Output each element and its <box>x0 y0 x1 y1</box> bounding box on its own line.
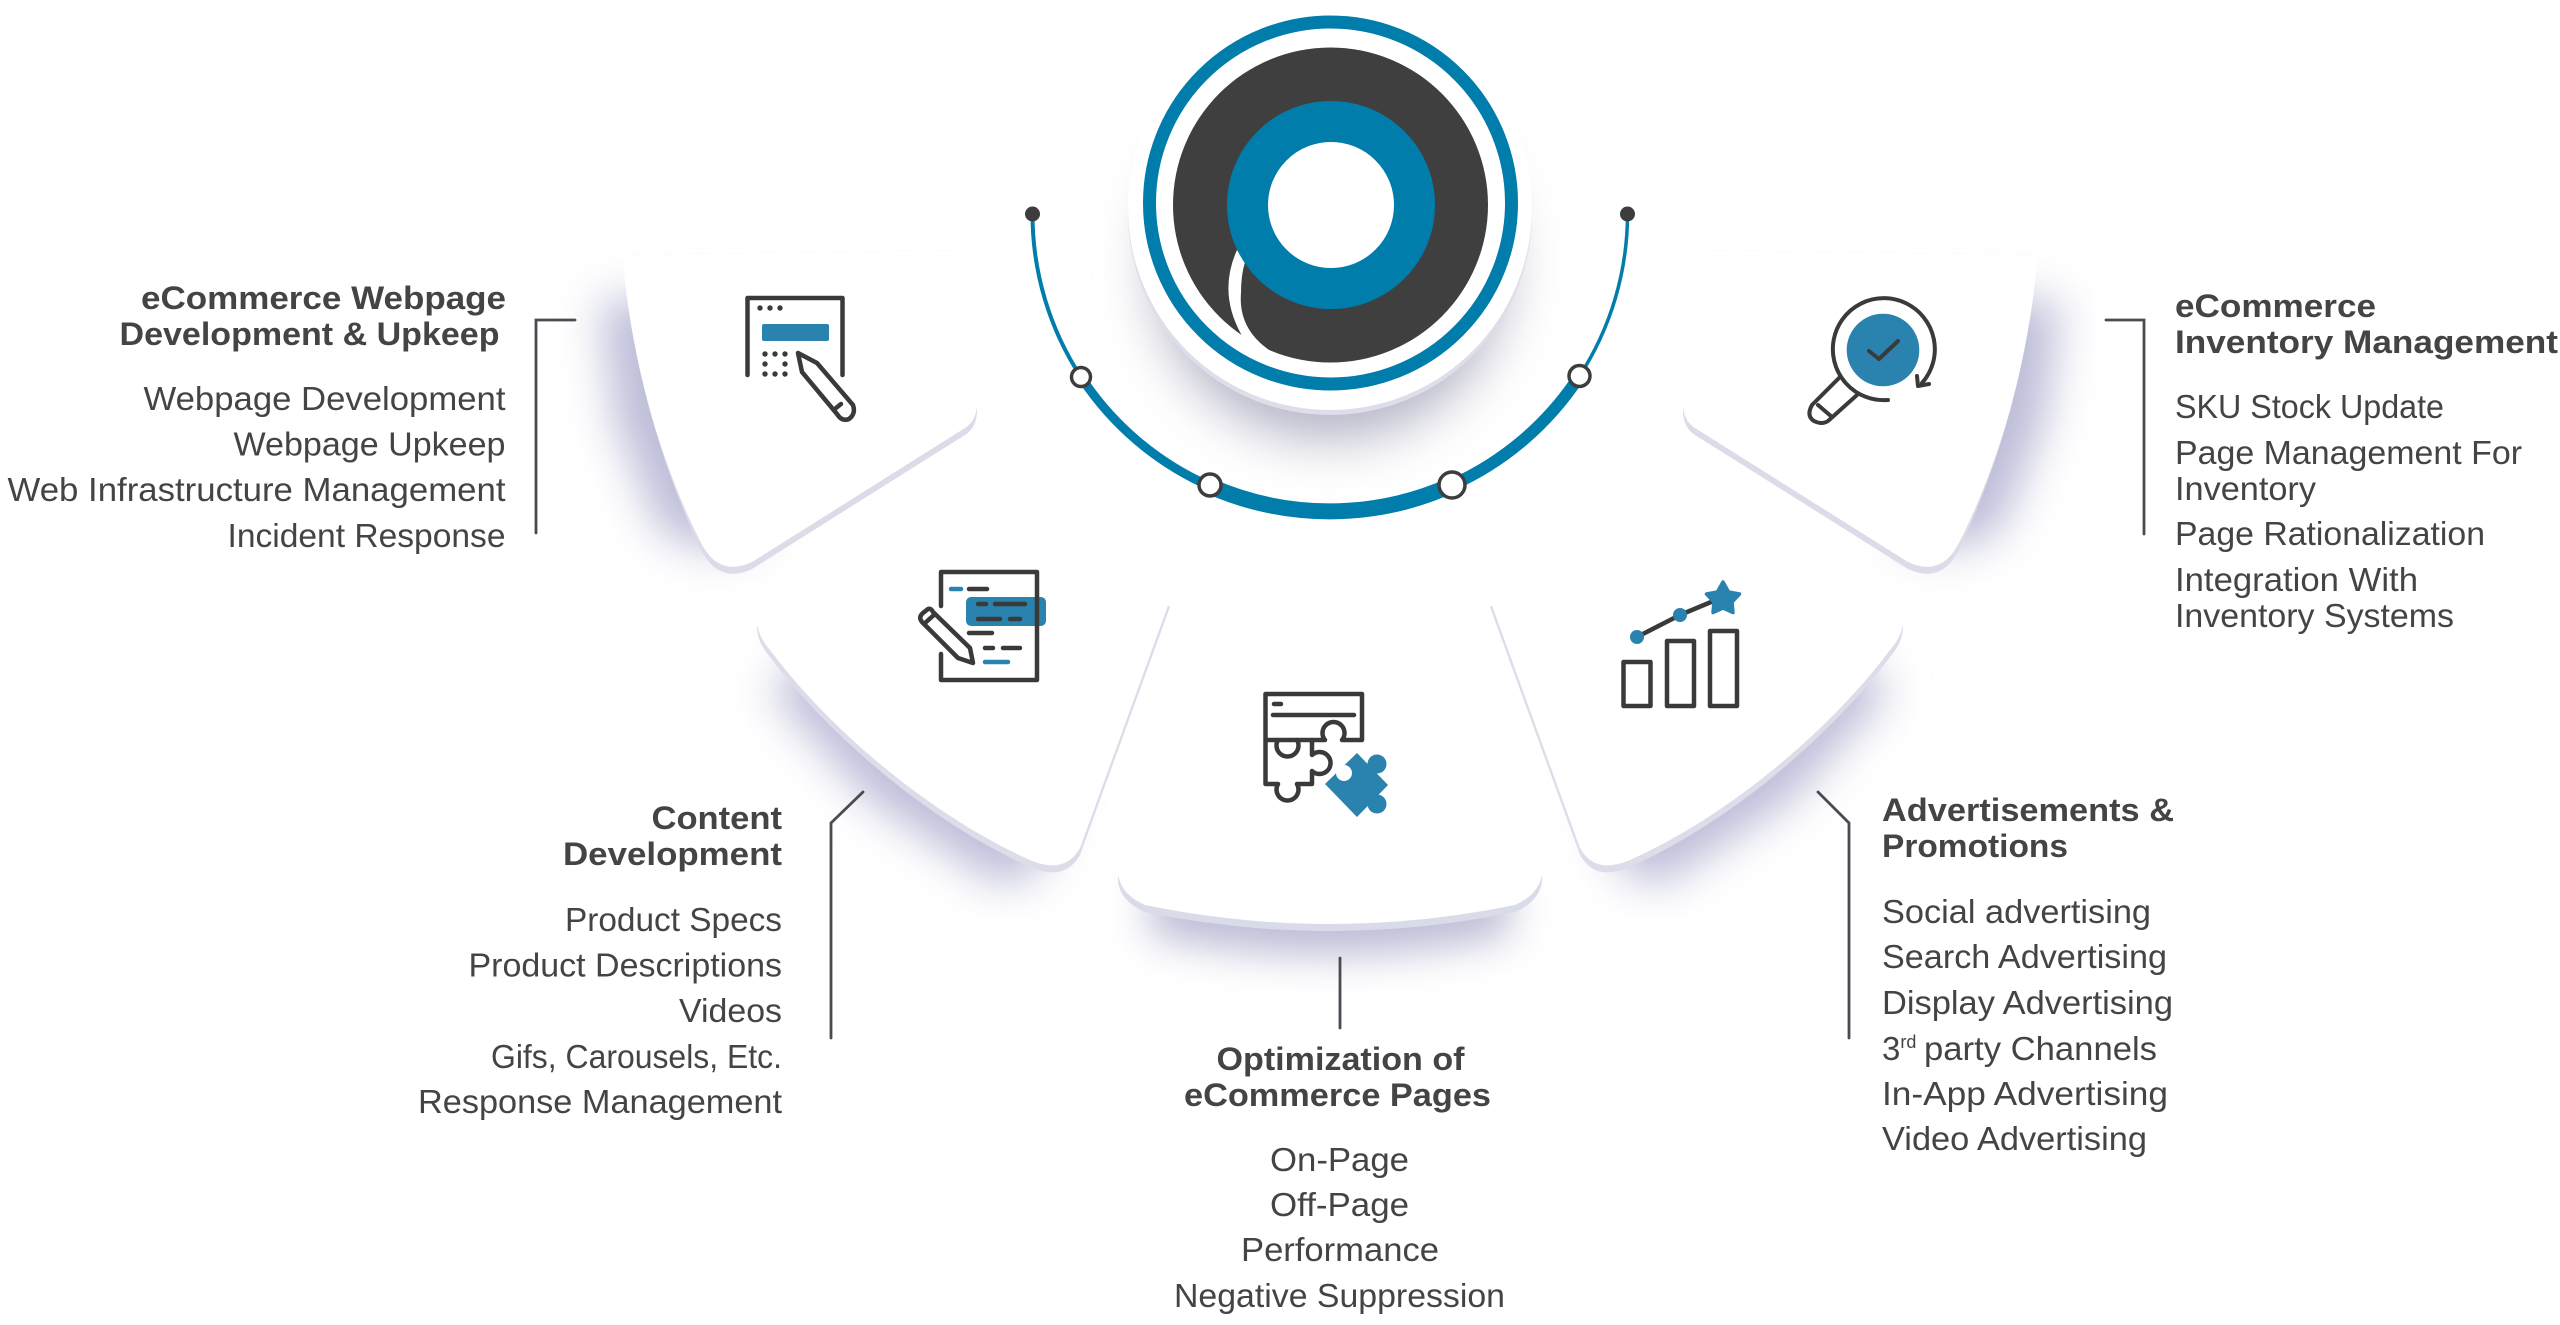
list: content development: Product Descriptions <box>468 946 782 984</box>
list: content development <box>418 901 782 1120</box>
list: inventory management: Page Rationalization <box>2175 515 2485 552</box>
list: webpage development <box>8 380 506 554</box>
list: advertisements and promotions: Social advertising <box>1882 893 2151 930</box>
text block: webpage development <box>8 280 506 554</box>
leader: webpage development <box>536 320 575 533</box>
list: optimization: Off-Page <box>1270 1186 1409 1223</box>
list: webpage development: Webpage Development <box>144 380 505 417</box>
list: inventory management: SKU Stock Update <box>2175 388 2444 425</box>
icon: bar chart with star <box>1624 582 1740 706</box>
list: advertisements and promotions: 3 <box>1882 1030 1900 1067</box>
panel: content development card <box>757 463 1170 885</box>
list: advertisements and promotions: In-App Advertising <box>1882 1075 2168 1112</box>
list: webpage development: Incident Response <box>228 517 506 554</box>
heading: inventory management: Inventory Management <box>2175 324 2558 360</box>
logo <box>1150 22 1512 384</box>
icon: magnifier with check <box>1809 298 1935 423</box>
icon: puzzle <box>1266 694 1388 817</box>
heading: inventory management: eCommerce <box>2175 288 2376 324</box>
heading: optimization: Optimization of <box>1216 1041 1465 1077</box>
list: advertisements and promotions: Search Advertising <box>1882 938 2167 975</box>
leader: advertisements <box>1818 792 1849 1038</box>
list: content development: Gifs, Carousels, Etc. <box>491 1038 782 1075</box>
heading: advertisements and promotions: Advertisements & <box>1882 792 2174 828</box>
central logo disc <box>1128 6 1532 440</box>
heading: inventory management <box>2175 288 2558 360</box>
list: optimization: On-Page <box>1270 1141 1409 1178</box>
icon: document with pencil <box>920 572 1046 680</box>
heading: optimization <box>1184 1041 1491 1113</box>
leader: optimization <box>1339 958 1341 1028</box>
panel: webpage development card <box>600 250 977 574</box>
heading: webpage development: Development & Upkeep <box>120 316 500 352</box>
leader: inventory management <box>2106 320 2144 534</box>
list: advertisements and promotions: Display Advertising <box>1882 984 2173 1021</box>
heading: webpage development <box>120 280 506 352</box>
heading: content development <box>563 800 782 872</box>
list: advertisements and promotions: rd <box>1900 1032 1916 1052</box>
heading: webpage development: eCommerce Webpage <box>141 280 506 316</box>
panel: advertisements card <box>1490 463 1903 885</box>
list: content development: Videos <box>679 992 782 1029</box>
panel: inventory management card <box>1683 250 2060 574</box>
list: webpage development: Webpage Upkeep <box>234 426 506 462</box>
leader: content development <box>831 792 863 1038</box>
panel: optimization card <box>1118 640 1542 955</box>
list: inventory management: Integration With <box>2175 561 2418 598</box>
list: advertisements and promotions <box>1882 893 2173 1157</box>
list: webpage development: Web Infrastructure Management <box>8 471 506 508</box>
arc with nodes <box>1025 206 1635 511</box>
heading: content development: Content <box>652 800 782 836</box>
list: optimization <box>1174 1141 1505 1314</box>
text block: content development <box>418 800 782 1120</box>
heading: content development: Development <box>563 836 782 872</box>
list: optimization: Performance <box>1241 1231 1439 1268</box>
list: advertisements and promotions: Video Advertising <box>1882 1120 2147 1157</box>
text block: inventory management <box>2175 288 2558 634</box>
list: inventory management <box>2175 388 2522 634</box>
list: inventory management: Page Management For <box>2175 434 2522 471</box>
text block: advertisements and promotions <box>1882 792 2174 1157</box>
list: inventory management: Inventory Systems <box>2175 597 2454 634</box>
list: content development: Response Management <box>418 1083 782 1120</box>
icon: webpage with pencil <box>748 298 854 420</box>
list: advertisements and promotions: party Channels <box>1924 1030 2157 1067</box>
list: inventory management: Inventory <box>2175 470 2317 507</box>
heading: optimization: eCommerce Pages <box>1184 1077 1491 1113</box>
text block: optimization of ecommerce pages <box>1174 1041 1505 1314</box>
heading: advertisements and promotions <box>1882 792 2174 864</box>
list: content development: Product Specs <box>565 901 782 938</box>
heading: advertisements and promotions: Promotions <box>1882 828 2068 864</box>
list: optimization: Negative Suppression <box>1174 1277 1505 1314</box>
